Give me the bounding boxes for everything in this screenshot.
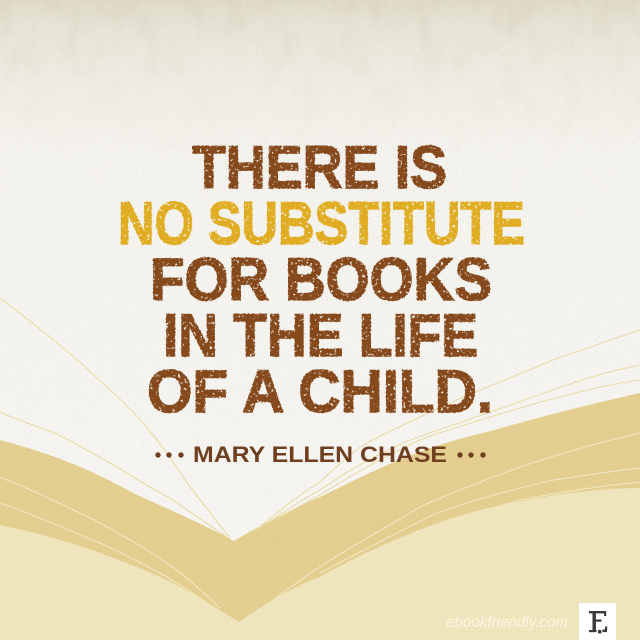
- line: THERE IS: THERE IS: [192, 134, 447, 201]
- line: NO SUBSTITUTE: NO SUBSTITUTE: [118, 190, 525, 257]
- paper background: [0, 0, 640, 140]
- book cover cream: [0, 488, 640, 640]
- author attribution: [155, 442, 486, 467]
- dots right: [457, 452, 486, 458]
- page edges on tan: [0, 433, 640, 610]
- logo mark: [589, 611, 607, 633]
- line: OF A CHILD.: OF A CHILD.: [147, 358, 493, 425]
- dots left: [155, 452, 184, 458]
- book page block: [0, 393, 640, 640]
- website credit: ebookfriendly.com: [446, 614, 568, 631]
- logo badge: [579, 603, 616, 640]
- line: FOR BOOKS: FOR BOOKS: [150, 246, 492, 313]
- line: IN THE LIFE: IN THE LIFE: [163, 302, 478, 369]
- author name: MARY ELLEN CHASE: [193, 442, 447, 467]
- loose pages: right: [253, 330, 640, 532]
- open book illustration: [0, 298, 640, 640]
- loose pages: left: [0, 298, 230, 538]
- quote text: [118, 134, 525, 425]
